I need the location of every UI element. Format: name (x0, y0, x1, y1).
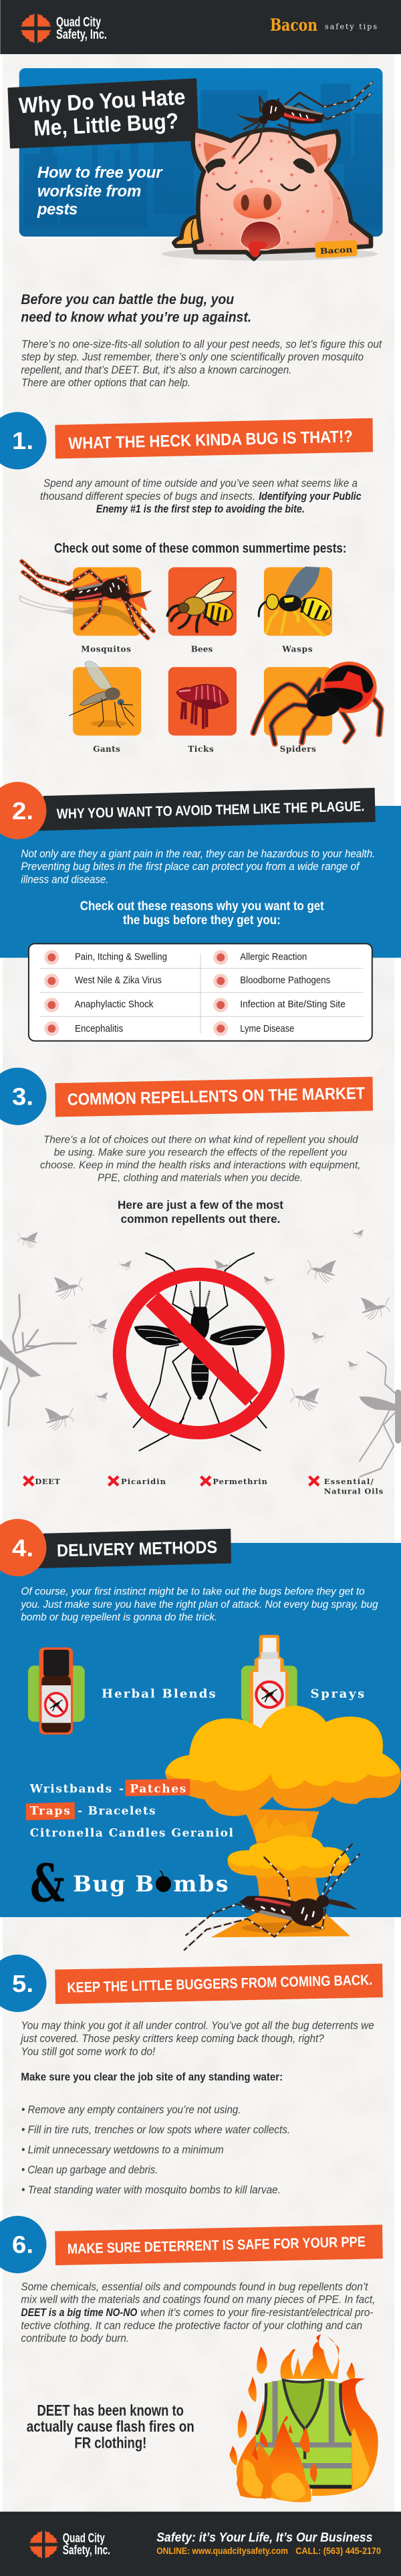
section 6 text: Some chemicals, essential oils and compounds found in bug repellents don’t (21, 2280, 369, 2293)
intro body text: There are other options that can help. (21, 377, 190, 389)
repellents heading: common repellents out there. (121, 1212, 280, 1226)
back flames (229, 2334, 378, 2499)
bullet list: • Limit unnecessary wetdowns to a minimum (21, 2143, 224, 2156)
mosquito on head (234, 82, 372, 163)
pest labels: Ticks (188, 744, 214, 754)
intro heading (21, 292, 251, 325)
ampersand: & (30, 1854, 65, 1914)
subtitle (37, 164, 163, 219)
reasons list: Bloodborne Pathogens (240, 976, 330, 986)
section 3 text: be using. Make sure you research the effects of the repellent you (54, 1147, 347, 1159)
number 3 (0, 1068, 47, 1125)
bullet list: • Fill in tire ruts, trenches or low spots where water collects. (21, 2123, 290, 2136)
repellent names: Permethrin (213, 1477, 268, 1486)
reasons heading: Check out these reasons why you want to get (80, 899, 324, 913)
section 3 text: There’s a lot of choices out there on what kind of repellent you should (43, 1134, 359, 1145)
bug bombs: Bug B (73, 1871, 154, 1896)
section 4 text (20, 1586, 378, 1623)
footer contact (156, 2545, 381, 2556)
section 6 (0, 2216, 383, 2502)
heading bar 4: DELIVERY METHODS (57, 1537, 217, 1560)
herbal blends bottle (28, 1647, 85, 1735)
tile: bees (168, 567, 237, 635)
section 6 text: tective clothing. It can reduce the protective factor of your clothing and can (21, 2319, 362, 2331)
number 6 (0, 2216, 47, 2273)
section 1 text: Identifying your Public (259, 490, 362, 503)
repellent list (24, 1477, 383, 1495)
open mouth and tongue (240, 221, 281, 250)
heading bar 4 (38, 1529, 231, 1568)
front flames (237, 2416, 317, 2502)
background mosquitoes (0, 1230, 401, 1477)
red x marks (24, 1477, 319, 1485)
helmet (174, 217, 214, 246)
tile: spiders (253, 662, 381, 744)
tile: gants (69, 661, 141, 736)
section 4 text: bomb or bug repellent is gonna do the trick. (21, 1612, 217, 1623)
large gray mosquito left (0, 1294, 77, 1427)
bullet list: • Clean up garbage and debris. (21, 2163, 158, 2176)
safety tips: safety tips (325, 22, 377, 31)
traps highlight (26, 1802, 75, 1820)
bullet list: • Treat standing water with mosquito bombs to kill larvae. (21, 2183, 281, 2196)
sprays bottle (241, 1635, 297, 1729)
section 2 (0, 782, 401, 1041)
dead mosquito (184, 1844, 360, 1950)
pest labels: Bees (191, 645, 213, 654)
section 1 text: Enemy #1 is the first step to avoiding the bite. (96, 503, 305, 515)
pest tiles (20, 561, 381, 744)
intro heading: Before you can battle the bug, you (21, 292, 234, 307)
large gray mosquito right (360, 1352, 401, 1477)
subtitle: pests (37, 200, 78, 219)
section 1 (0, 412, 381, 754)
pig illustration (162, 82, 378, 261)
pest labels: Wasps (281, 645, 313, 654)
patches highlight (126, 1779, 190, 1796)
intro body text: There’s no one-size-fits-all solution to all your pest needs, so let’s figure this out (21, 338, 383, 350)
section 5 text: just covered. Those pesky critters keep coming back though, right? (20, 2032, 324, 2045)
number 5 (0, 1955, 47, 2012)
section 5 text: You may think you got it all under control. You’ve got all the bug deterrents we (21, 2019, 374, 2032)
section 3 (0, 1068, 401, 1495)
hero panel (9, 68, 382, 261)
intro body text: repellent, and that’s DEET. But, it’s also a known carcinogen. (21, 364, 291, 376)
section 2 text: Preventing bug bites in the first place can protect you from a wide range of (21, 860, 360, 873)
reasons list: Encephalitis (75, 1024, 123, 1034)
intro body text (21, 338, 383, 389)
subtitle: How to free your (37, 164, 163, 182)
delivery methods text: Wristbands (29, 1782, 112, 1796)
pest labels: Gants (93, 744, 120, 754)
prohibition sign with mosquito (120, 1253, 278, 1451)
delivery methods text: Bracelets (88, 1804, 156, 1818)
heading bar 3: COMMON REPELLENTS ON THE MARKET (68, 1084, 365, 1109)
intro heading: need to know what you’re up against. (21, 310, 251, 325)
number 1: 1. (12, 427, 33, 454)
section 3 text: PPE, clothing and materials when you decide. (98, 1172, 303, 1184)
number 2 (0, 782, 47, 839)
title banner: Me, Little Bug? (33, 108, 179, 140)
section 2 text (21, 847, 375, 886)
sprays label: Sprays (310, 1687, 364, 1701)
pest labels: Mosquitos (81, 645, 131, 654)
blue band (0, 806, 401, 958)
tile: wasps (259, 567, 335, 635)
DEET callout: DEET has been known to (37, 2402, 184, 2419)
logo: Quad City Safety (21, 13, 51, 43)
repellent names: Picaridin (121, 1477, 166, 1486)
pest labels: Spiders (280, 744, 316, 754)
number 1 (0, 412, 47, 469)
repellent names: Essential/ (324, 1477, 374, 1486)
Bacon tag: Bacon (319, 245, 353, 256)
reasons list: Lyme Disease (240, 1024, 294, 1034)
delivery methods text: Citronella Candles Geraniol (30, 1826, 234, 1840)
title banner (9, 80, 198, 148)
tile: ticks (168, 667, 237, 736)
number 6: 6. (12, 2231, 33, 2259)
section 3 text (40, 1134, 361, 1184)
blue band (0, 1543, 401, 1917)
repellent names: DEET (35, 1477, 60, 1486)
heading bar 5 (55, 1964, 383, 2004)
reasons table (29, 944, 372, 1041)
reasons list: Anaphylactic Shock (75, 1000, 154, 1010)
repellents heading (118, 1198, 283, 1226)
subtitle: worksite from (37, 182, 141, 200)
company name: Quad City (56, 15, 102, 30)
company name: Safety, Inc. (56, 27, 107, 42)
footer logo (29, 2531, 57, 2559)
bullet list: • Remove any empty containers you’re not using. (21, 2103, 241, 2116)
section 5 (0, 1955, 383, 2196)
footer company name: Safety, Inc. (63, 2544, 110, 2558)
delivery methods text: - (78, 1804, 82, 1818)
herbal blends label: Herbal Blends (102, 1687, 216, 1701)
heading bar 1 (55, 418, 373, 458)
delivery methods text: - (119, 1782, 124, 1796)
reasons list: Allergic Reaction (240, 952, 307, 963)
black mosquito (133, 1253, 267, 1451)
DEET callout: actually cause flash fires on (27, 2418, 194, 2435)
footer company name: Quad City (63, 2531, 105, 2545)
section 4 text: Of course, your first instinct might be to take out the bugs before they get to (21, 1586, 365, 1597)
vest (256, 2380, 352, 2488)
footer contact: ONLINE: www.quadcitysafety.com (156, 2545, 288, 2556)
right inner flame (352, 2428, 370, 2490)
header bar (0, 0, 401, 54)
section 5 text: You still got some work to do! (21, 2045, 156, 2057)
reasons list: Infection at Bite/Sting Site (240, 1000, 346, 1010)
traps highlight: Traps (30, 1804, 70, 1818)
reasons list: West Nile & Zika Virus (75, 976, 162, 986)
footer contact: CALL: (563) 445-2170 (295, 2545, 381, 2556)
footer company name (63, 2531, 110, 2558)
section 6 text: contribute to body burn. (21, 2331, 129, 2344)
section 6 text (21, 2280, 375, 2344)
repellents heading: Here are just a few of the most (118, 1198, 283, 1211)
delivery methods text (26, 1779, 234, 1840)
number 2: 2. (12, 797, 33, 825)
number 5: 5. (12, 1970, 33, 1997)
reasons heading (80, 899, 324, 927)
title banner: Why Do You Hate (18, 84, 186, 118)
section 2 text: illness and disease. (21, 873, 108, 886)
company name (56, 15, 107, 42)
reasons list (75, 952, 346, 1034)
heading bar 6 (55, 2225, 383, 2265)
intro body text: step by step. Just remember, there’s only one scientifically proven mosquito (21, 351, 364, 364)
number 3: 3. (12, 1083, 33, 1111)
heading bar 3 (55, 1077, 373, 1117)
section 4 text: you. Just make sure you have the right plan of attack. Not every bug spray, bug (20, 1599, 378, 1610)
bomb (156, 1871, 171, 1894)
number 4 (0, 1519, 47, 1576)
flaming safety vest (229, 2334, 378, 2502)
heading bar 2 (38, 788, 376, 831)
tile: mosquitos (20, 561, 154, 638)
footer (0, 2512, 401, 2576)
bug bombs (73, 1871, 229, 1896)
section 6 text: DEET is a big time NO-NO (21, 2306, 137, 2319)
DEET callout: FR clothing! (74, 2434, 146, 2451)
section 1 text (40, 478, 362, 515)
section 6 text: when it’s comes to your fire-resistant/electrical pro- (140, 2306, 374, 2319)
footer slogan: Safety: it’s Your Life, It’s Our Business (156, 2530, 373, 2545)
bomb: o (157, 1875, 168, 1894)
section 4 (0, 1519, 401, 1950)
section 1 text: thousand different species of bugs and insects. (40, 490, 255, 503)
reasons heading: the bugs before they get you: (123, 913, 281, 927)
repellent names: Natural Oils (324, 1486, 383, 1495)
heading bar 1: WHAT THE HECK KINDA BUG IS THAT!? (68, 427, 353, 453)
bomb cloud (165, 1705, 401, 1950)
red prohibition circle (120, 1274, 278, 1433)
DEET callout (27, 2402, 194, 2451)
section 3 text: choose. Keep in mind the health risks and interactions with equipment, (40, 1160, 361, 1171)
repellent names (35, 1477, 383, 1495)
snout (233, 188, 281, 219)
bug bombs: mbs (174, 1871, 229, 1896)
bullets (44, 950, 228, 1036)
number 4: 4. (12, 1534, 33, 1562)
reasons list: Pain, Itching & Swelling (75, 952, 167, 963)
standing water heading: Make sure you clear the job site of any standing water: (21, 2070, 283, 2083)
pest labels (81, 645, 316, 754)
bite spots (198, 140, 353, 247)
Bacon tag (315, 240, 358, 258)
patches highlight: Patches (130, 1782, 186, 1796)
section 1 text: Spend any amount of time outside and you’ve seen what seems like a (43, 478, 358, 490)
pests heading: Check out some of these common summertime pests: (54, 541, 346, 556)
city skyline (24, 84, 382, 227)
bullet list (21, 2103, 290, 2196)
Bacon brand: Bacon (270, 15, 317, 35)
section 5 text (20, 2019, 374, 2057)
